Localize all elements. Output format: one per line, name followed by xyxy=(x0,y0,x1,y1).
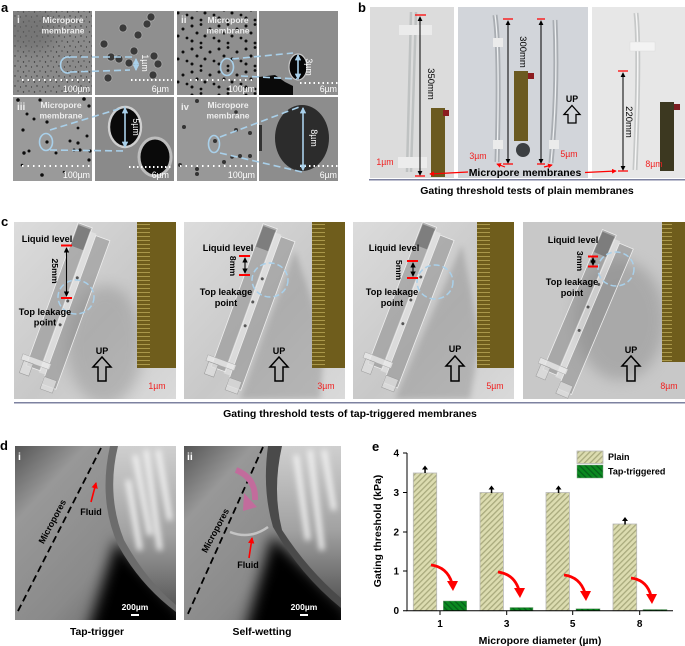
divider c xyxy=(14,402,685,404)
height labels xyxy=(425,36,634,138)
annotation text: point xyxy=(561,288,583,298)
annotation text xyxy=(19,234,598,328)
tile: iii overview: Micropore xyxy=(40,100,82,110)
y ticks labels: 0 xyxy=(393,606,399,617)
tile: i overview: i xyxy=(17,15,20,26)
tile: iii zoomed pores: 6µm xyxy=(152,170,169,180)
tile: iv overview: 100µm xyxy=(228,170,255,180)
photo: 1 µm tube xyxy=(370,7,454,178)
legend xyxy=(577,451,665,478)
photo: self-wetting xyxy=(184,446,341,620)
annotation text: point xyxy=(381,298,403,308)
panel d: microscopy frames xyxy=(0,438,350,646)
y ticks labels: 3 xyxy=(393,488,399,499)
gap values xyxy=(50,251,585,284)
photo: 3 and 5 µm tubes xyxy=(458,7,588,178)
scale bars: 200µm xyxy=(291,602,318,612)
pore size labels xyxy=(376,149,663,169)
photo: 5 µm device xyxy=(353,222,514,399)
pore size labels: 3µm xyxy=(317,381,335,391)
tile: iv overview xyxy=(177,97,257,181)
up arrows: UP xyxy=(449,344,461,354)
tile: ii overview xyxy=(177,11,257,95)
y ticks labels: 4 xyxy=(393,448,399,460)
bars tap-triggered xyxy=(443,601,667,611)
annotation text: Top leakage xyxy=(200,287,252,297)
annotation text: Liquid level xyxy=(203,243,253,253)
annotation text: Top leakage xyxy=(546,277,598,287)
red fluid arrows xyxy=(91,483,252,558)
micropores labels: Micropores xyxy=(200,507,231,554)
axes xyxy=(403,453,673,615)
up arrows: UP xyxy=(625,345,637,355)
tile: i overview: 100µm xyxy=(63,84,90,94)
label e: e xyxy=(372,439,379,454)
divider b xyxy=(369,179,685,180)
x ticks labels: 1 xyxy=(437,619,443,630)
x ticks labels xyxy=(437,619,643,630)
pore size labels: 5µm xyxy=(486,381,504,391)
annotation text: Liquid level xyxy=(548,235,598,245)
x ticks labels: 8 xyxy=(637,619,643,630)
y ticks labels: 2 xyxy=(393,528,399,538)
icon: up arrow xyxy=(564,94,580,123)
pore size labels: 8µm xyxy=(645,159,663,169)
annotation text: point xyxy=(215,298,237,308)
annotation text: Top leakage xyxy=(19,307,71,317)
height labels: 350mm xyxy=(425,68,436,100)
pore size labels xyxy=(148,381,678,391)
photo: 8 µm tube xyxy=(592,7,685,178)
up arrows xyxy=(93,344,640,381)
scale bars xyxy=(122,602,318,616)
label c: c xyxy=(1,214,8,229)
frame numerals xyxy=(18,451,193,463)
pore size labels: 3µm xyxy=(469,151,487,161)
tile: ii overview: Micropore xyxy=(207,15,249,25)
micropores labels xyxy=(37,498,231,554)
dimension arrows xyxy=(420,17,623,175)
level markers xyxy=(61,246,598,298)
up arrows: UP xyxy=(96,346,108,356)
tile: ii zoomed pore: 3µm xyxy=(304,58,314,76)
photo: 3 µm device xyxy=(184,222,345,399)
fluid labels: Fluid xyxy=(80,507,102,517)
gap values: 25mm xyxy=(50,258,60,284)
callout: micropore membranes: Micropore membranes xyxy=(469,167,581,179)
y axis title: Gating threshold (kPa) xyxy=(372,475,384,587)
up limit arrows xyxy=(422,466,628,524)
icon: up arrow: UP xyxy=(566,94,578,104)
annotation text: Liquid level xyxy=(369,243,419,253)
up arrows: UP xyxy=(273,346,285,356)
photo: 1 µm device xyxy=(14,222,176,399)
micropore dashed lines xyxy=(17,447,263,616)
tile: iii overview: iii xyxy=(17,102,26,113)
tile: i overview xyxy=(13,11,92,95)
height labels: 220mm xyxy=(623,106,634,138)
red level ticks xyxy=(415,15,628,176)
tile: iv overview: iv xyxy=(181,102,190,113)
x ticks labels: 5 xyxy=(570,619,576,630)
red trend arrows xyxy=(431,565,657,604)
tile: iii overview xyxy=(13,97,92,181)
callout: micropore membranes xyxy=(430,164,616,179)
tile: iii zoomed pores: 5µm xyxy=(131,118,141,136)
tile: iv zoomed pore xyxy=(259,97,338,181)
tile: i zoomed pores: 6µm xyxy=(152,84,169,94)
pore size labels: 1µm xyxy=(148,381,166,391)
label a: a xyxy=(1,0,9,15)
scale bars: 200µm xyxy=(122,602,149,612)
pore size labels: 1µm xyxy=(376,157,394,167)
bars plain xyxy=(413,473,637,611)
tile: ii overview: 100µm xyxy=(228,84,255,94)
tile: i overview: Micropore xyxy=(42,15,84,25)
gap values: 5mm xyxy=(394,260,404,280)
captions d: Tap-trigger xyxy=(70,627,124,638)
callouts: zoom guides xyxy=(40,53,303,172)
label b: b xyxy=(358,0,366,15)
gap values: 8mm xyxy=(228,256,238,276)
frame numerals: ii xyxy=(187,451,193,463)
micropores labels: Micropores xyxy=(37,498,68,545)
photo: 8 µm device xyxy=(523,222,685,399)
annotation text: point xyxy=(34,318,56,328)
legend: Plain xyxy=(608,452,630,462)
panel a: SEM images of micropore membranes xyxy=(1,0,338,181)
y ticks labels: 1 xyxy=(393,566,399,578)
panel e: bar chart xyxy=(372,439,673,646)
frame numerals: i xyxy=(18,451,21,463)
panel c: tap-triggered tests xyxy=(1,214,685,420)
caption c: Gating threshold tests of tap-triggered membranes xyxy=(223,408,477,420)
tile: ii overview: ii xyxy=(181,15,187,26)
tile: i zoomed pores xyxy=(95,11,174,95)
tile: ii zoomed pore: 6µm xyxy=(320,84,337,94)
tile: i overview: membrane xyxy=(42,26,85,36)
label d: d xyxy=(0,438,8,453)
legend: Tap-triggered xyxy=(608,466,665,476)
tile: i zoomed pores: 1µm xyxy=(140,54,150,72)
captions d xyxy=(70,627,291,638)
fluid labels: Fluid xyxy=(237,560,259,570)
captions d: Self-wetting xyxy=(233,627,291,638)
tile: iii overview: 100µm xyxy=(63,170,90,180)
x ticks labels: 3 xyxy=(504,619,510,630)
fluid labels xyxy=(80,507,259,570)
tile: ii overview: membrane xyxy=(206,26,250,36)
gap values: 3mm xyxy=(575,251,585,271)
tile: ii zoomed pore xyxy=(259,11,338,95)
pore size labels: 8µm xyxy=(660,381,678,391)
pink curved arrow xyxy=(236,470,257,511)
y ticks labels xyxy=(393,448,399,617)
height labels: 300mm xyxy=(517,36,528,68)
tile: iv overview: membrane xyxy=(206,110,250,120)
tile: iv zoomed pore: 6µm xyxy=(320,170,337,180)
pore size labels: 5µm xyxy=(560,149,578,159)
tile: iii overview: membrane xyxy=(40,110,83,120)
leakage circles xyxy=(58,252,634,314)
photo: tap-trigger xyxy=(15,446,176,620)
level arrows xyxy=(66,248,593,296)
tile: iv zoomed pore: 8µm xyxy=(309,129,319,147)
caption b: Gating threshold tests of plain membranes xyxy=(420,185,634,197)
tile: iv overview: Micropore xyxy=(207,100,249,110)
panel b: plain membrane tests xyxy=(358,0,685,197)
tile: iii zoomed pores xyxy=(95,97,174,181)
annotation text: Top leakage xyxy=(366,287,418,297)
annotation text: Liquid level xyxy=(22,234,72,244)
